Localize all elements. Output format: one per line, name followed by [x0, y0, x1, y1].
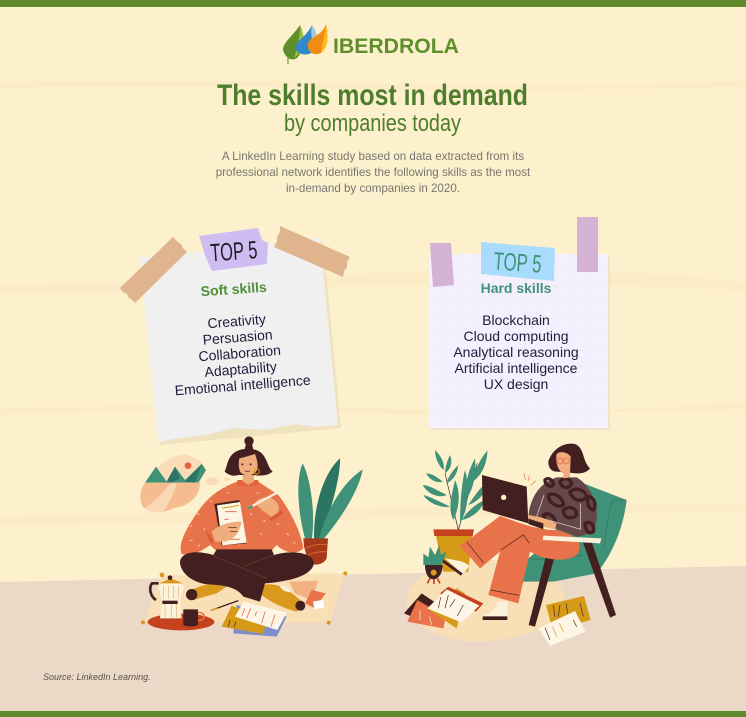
face	[239, 454, 258, 475]
top 5 blue label	[481, 242, 555, 281]
sweater	[181, 482, 303, 555]
hard skills list: Blockchain	[482, 312, 550, 328]
panel: soft skills note	[120, 226, 350, 445]
torn paper	[140, 238, 338, 442]
clipboard	[214, 500, 247, 545]
hair	[225, 449, 273, 476]
hard skills list	[453, 312, 579, 392]
illustration: woman with laptop	[404, 444, 627, 646]
tape right	[577, 217, 598, 272]
source note: Source: LinkedIn Learning.	[43, 672, 151, 682]
intro text: professional network identifies the following skills as the most	[216, 166, 531, 179]
floor	[0, 566, 746, 717]
chair legs	[529, 540, 559, 627]
thought bubble landscape	[140, 455, 230, 512]
head and hair	[548, 444, 590, 478]
soft skills list: Emotional intelligence	[174, 372, 311, 398]
laptop	[482, 473, 543, 529]
face and neck	[243, 473, 254, 485]
hand	[528, 515, 557, 529]
soft skills list: Persuasion	[202, 326, 273, 348]
grid paper	[430, 255, 610, 430]
hard skills list: Analytical reasoning	[453, 344, 579, 360]
top 5 purple label	[199, 228, 268, 271]
title: The skills most in demand	[217, 79, 528, 112]
papers near right knee	[289, 581, 318, 600]
logo wordmark: IBERDROLA	[333, 35, 459, 58]
tape left	[430, 243, 454, 287]
subtitle: by companies today	[284, 110, 461, 137]
hands	[212, 522, 242, 542]
soft skills list	[174, 311, 311, 398]
illustration: woman with notepad	[140, 436, 363, 637]
rug	[407, 560, 565, 642]
tape left	[120, 237, 187, 303]
plant	[298, 458, 363, 565]
small plant	[423, 545, 447, 584]
soft skills list: Collaboration	[198, 342, 281, 364]
intro text	[216, 150, 531, 195]
soft skills list: Creativity	[207, 311, 266, 331]
pen	[247, 492, 278, 509]
intro text: in-demand by companies in 2020.	[286, 182, 460, 195]
paper stack	[233, 605, 287, 637]
logo	[283, 24, 459, 64]
rug	[143, 573, 345, 623]
pencil	[211, 601, 238, 610]
trousers	[460, 516, 580, 603]
top 5 purple label: TOP 5	[210, 236, 258, 267]
shoes	[445, 558, 469, 573]
soft skills list: Adaptability	[204, 358, 277, 380]
top bar	[0, 0, 746, 7]
papers right	[538, 596, 591, 646]
palm plant	[423, 450, 490, 572]
socks	[192, 584, 227, 600]
title	[217, 79, 528, 137]
armrest	[543, 536, 601, 543]
hard skills list: Artificial intelligence	[455, 360, 578, 376]
armchair	[522, 483, 627, 582]
soft skills heading: Soft skills	[200, 279, 267, 299]
patterned sweater	[528, 477, 597, 537]
hard skills list: Cloud computing	[463, 328, 569, 344]
trousers	[180, 549, 314, 602]
bottom bar	[0, 711, 746, 717]
paper shadow	[143, 241, 341, 445]
icon: logo leaf and drops	[283, 24, 328, 64]
top 5 blue label: TOP 5	[493, 247, 542, 279]
moka pot	[148, 575, 214, 630]
intro text: A LinkedIn Learning study based on data extracted from its	[222, 150, 524, 163]
hard skills list: UX design	[484, 376, 548, 392]
panel: hard skills note	[429, 217, 610, 430]
hard skills heading: Hard skills	[481, 280, 552, 296]
papers left	[404, 587, 483, 628]
tape right	[274, 226, 350, 277]
